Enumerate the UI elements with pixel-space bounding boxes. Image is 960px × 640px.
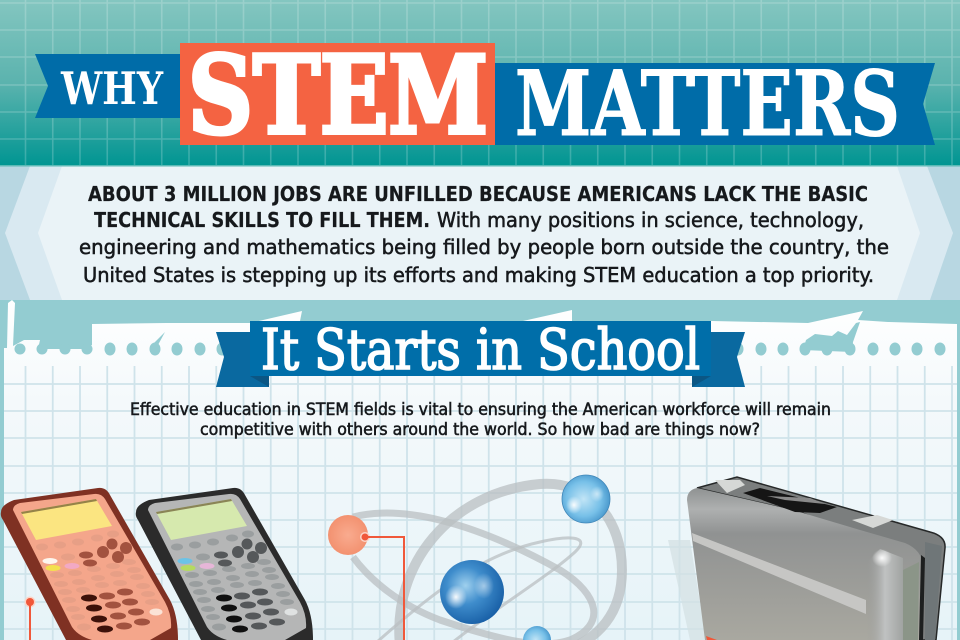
- notebook paper panel: [0, 300, 960, 640]
- section intro text: competitive with others around the world. So how bad are things now?: [200, 420, 760, 439]
- title banner: [35, 33, 935, 159]
- title word: why: WHY: [60, 62, 164, 115]
- punched holes: [14, 342, 946, 356]
- ribbon: why: [35, 54, 182, 118]
- atom sphere: center blue: [440, 560, 504, 624]
- ribbon: matters: [494, 63, 935, 145]
- orange callout tip: [706, 636, 717, 640]
- title word: matters: MATTERS: [515, 51, 900, 157]
- section intro text: Effective education in STEM fields is vital to ensuring the American workforce will remain: [130, 400, 831, 419]
- heading text: It Starts in School: [261, 318, 700, 383]
- paper tears: [150, 322, 860, 352]
- intro text: United States is stepping up its efforts and making STEM education a top priority.: [83, 263, 874, 287]
- briefcase back panel: [697, 477, 945, 640]
- icon: briefcase: [668, 477, 945, 640]
- intro text: ABOUT 3 MILLION JOBS ARE UNFILLED BECAUSE AMERICANS LACK THE BASIC: [88, 182, 868, 206]
- atom sphere: small blue: [523, 626, 551, 640]
- icon: grey calculator: [136, 488, 313, 640]
- briefcase side bevel: [867, 549, 903, 640]
- atom sphere: light blue: [562, 475, 610, 523]
- intro text: engineering and mathematics being filled by people born outside the country, the: [79, 235, 889, 259]
- orange stem box: [180, 43, 495, 145]
- briefcase clasps: [715, 480, 893, 528]
- briefcase front: [687, 488, 923, 640]
- briefcase shadow: [668, 540, 706, 640]
- torn paper sheet: [4, 300, 957, 640]
- connector: calculator callout: [24, 596, 36, 640]
- briefcase stripe: [692, 533, 866, 614]
- icon: atom: [328, 475, 622, 640]
- intro text: With many positions in science, technology,: [437, 208, 864, 232]
- connector: atom callout: [360, 532, 404, 640]
- intro strip: [0, 165, 960, 300]
- intro text: [79, 182, 889, 287]
- atom sphere: pink: [328, 515, 368, 555]
- atom orbits: [353, 484, 622, 640]
- header background: [0, 0, 960, 166]
- title word: stem: STEM: [188, 33, 488, 159]
- briefcase handle: [743, 488, 837, 513]
- intro text: TECHNICAL SKILLS TO FILL THEM.: [94, 208, 430, 232]
- section intro text: [130, 400, 831, 439]
- section heading ribbon: [216, 318, 745, 387]
- icon: orange calculator: [1, 488, 178, 640]
- briefcase side edge: [903, 555, 925, 640]
